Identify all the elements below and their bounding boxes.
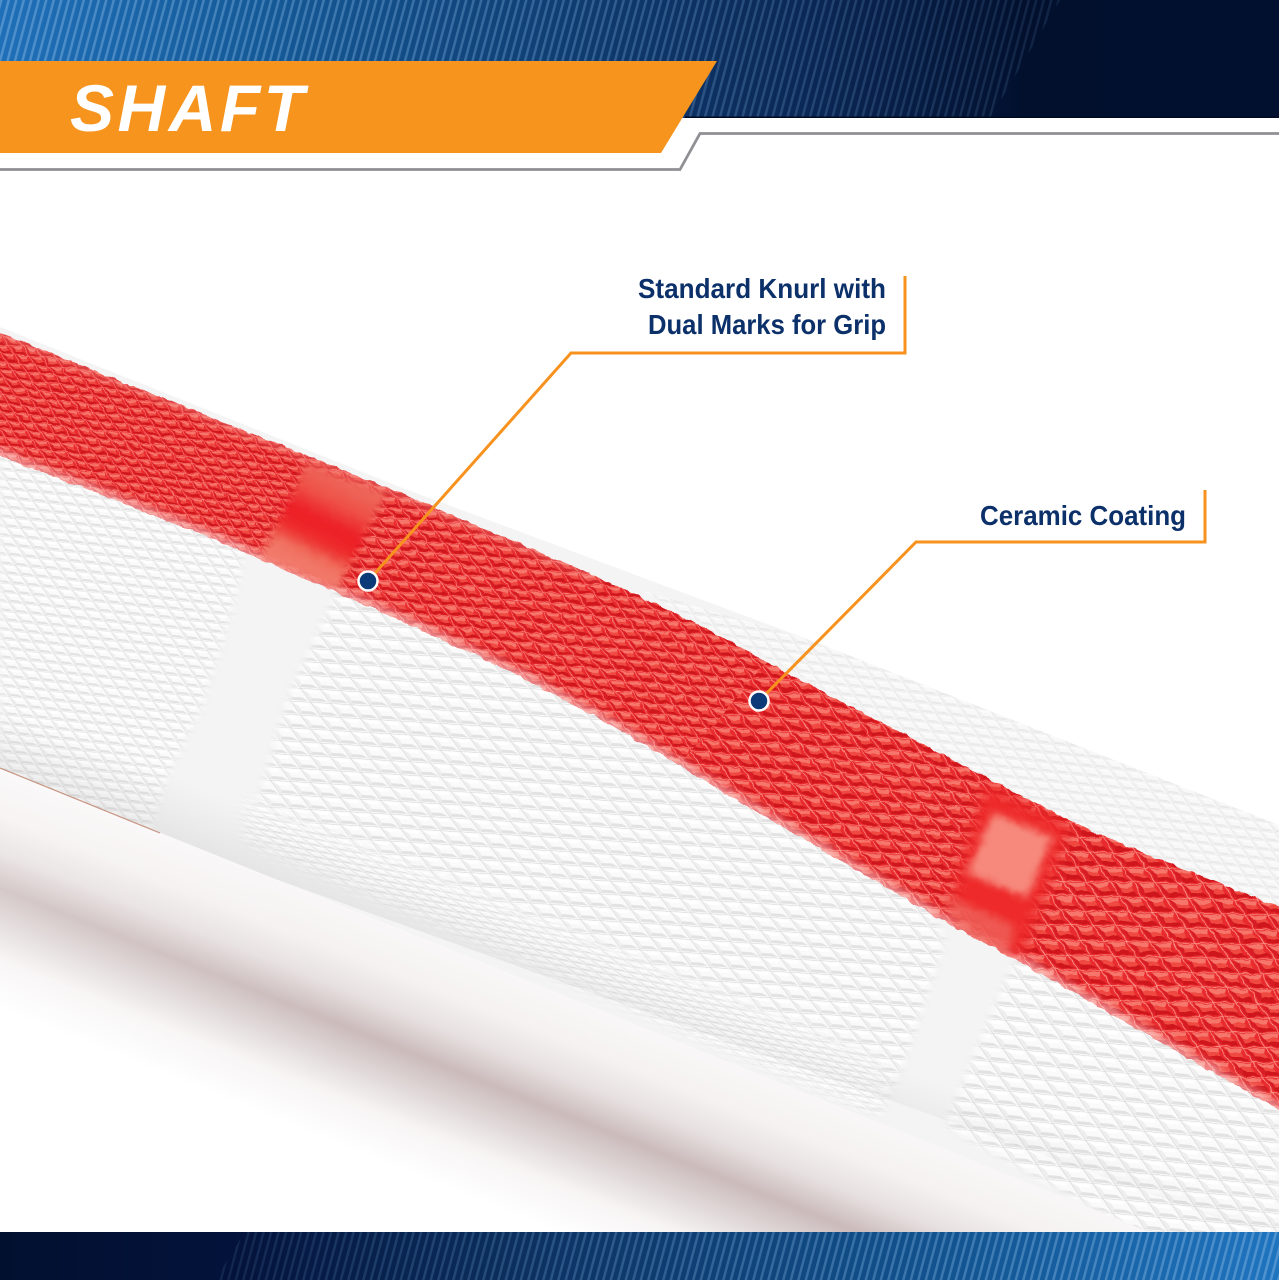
header diagonal stripes bbox=[0, 0, 1060, 118]
knurl: right white section bbox=[946, 961, 1279, 1232]
knurl: middle lower fine section bbox=[241, 801, 886, 1112]
barbell shaft photo bbox=[0, 300, 1279, 1240]
knurl: left white section bbox=[0, 458, 243, 826]
right mark speckled lower area bbox=[945, 895, 1015, 965]
right mark saturated halo bbox=[950, 785, 1070, 960]
callout text: Ceramic Coating bbox=[980, 500, 1186, 531]
title tab: SHAFT bbox=[0, 61, 717, 153]
right smooth dual mark bbox=[967, 813, 1053, 898]
callout: standard knurl bbox=[358, 273, 905, 590]
callout text: Dual Marks for Grip bbox=[648, 309, 886, 340]
callout text: Standard Knurl with bbox=[638, 273, 886, 304]
callout marker dot bbox=[358, 572, 378, 590]
knurl: middle white section bbox=[254, 592, 946, 1112]
callout marker dot bbox=[750, 692, 768, 710]
red band pale lower edge bbox=[0, 448, 1279, 1122]
red band pale upper edge bbox=[0, 325, 600, 578]
blurred second bar and shadow bbox=[0, 768, 1160, 1236]
knurl: upper coated strip bbox=[642, 590, 1279, 906]
footer diagonal stripes bbox=[215, 1232, 1279, 1280]
shaft lower edge tint bbox=[0, 768, 160, 833]
left smooth dual mark bbox=[260, 463, 387, 590]
callout leader line bbox=[368, 276, 905, 581]
callout text bbox=[638, 273, 886, 340]
top header banner bbox=[0, 0, 1279, 118]
red ceramic knurl band bbox=[0, 334, 1279, 1110]
header grey rule bbox=[0, 134, 1279, 170]
title tab: SHAFT: SHAFT bbox=[70, 71, 309, 145]
callout leader line bbox=[759, 490, 1205, 701]
callout: ceramic coating bbox=[750, 490, 1205, 710]
shaft base bbox=[0, 327, 1078, 1202]
shaft lower shading bbox=[0, 743, 920, 1110]
bottom footer banner bbox=[0, 1232, 1279, 1280]
